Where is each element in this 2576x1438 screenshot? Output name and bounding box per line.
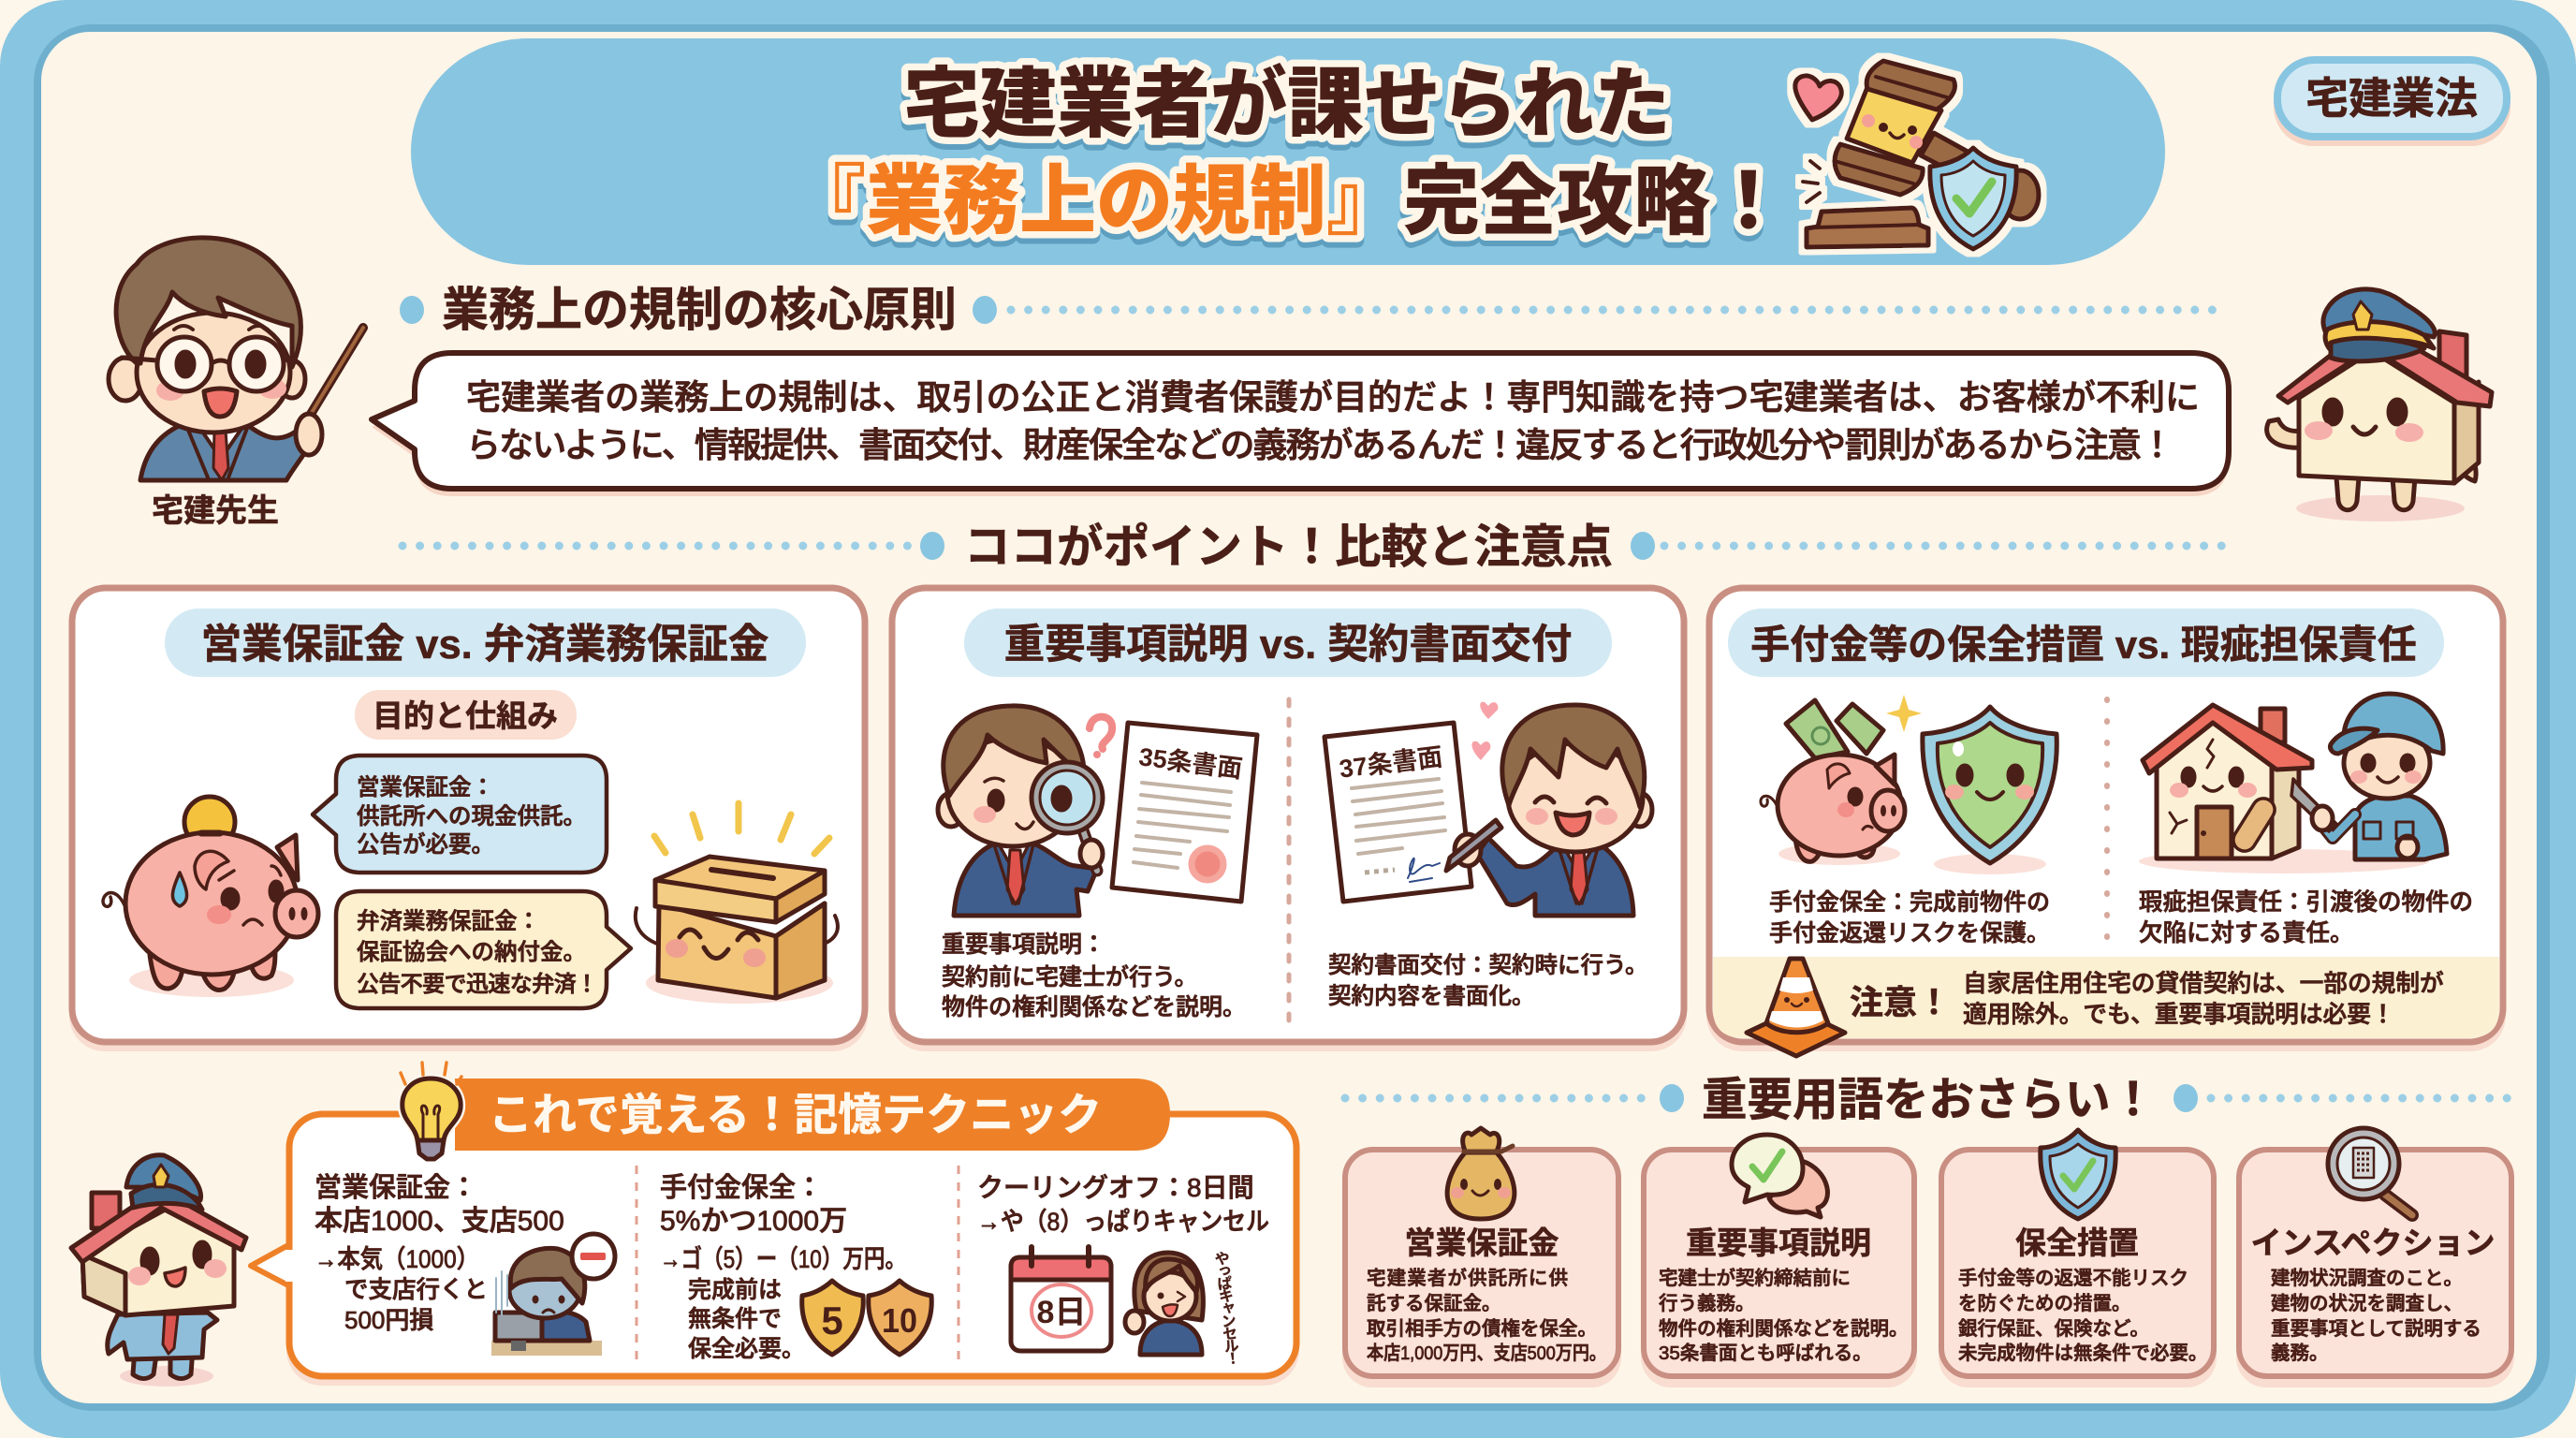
section heading: core principles: 業務上の規制の核心原則 [442,284,957,336]
icon: number 5 and 10 shields: 10 [882,1301,917,1340]
text: 手付金保全 mnemonic [660,1172,906,1362]
icon: worried piggy bank [103,797,318,997]
section heading: points: ココがポイント！比較と注意点 [964,521,1613,573]
memory heading banner: これで覚える！記憶テクニック [489,1090,1102,1139]
text: 契約書面交付: 契約内容を書面化。 [1328,983,1535,1009]
icon: number 5 and 10 shields: 5 [821,1299,843,1343]
character: house with police hat [2267,289,2492,521]
icon: 35条書面 document: 35条書面 [1137,742,1244,784]
icon: lightbulb [401,1063,461,1159]
icon: girl cancelling [1125,1253,1203,1355]
text: 手付金保全 mnemonic: 保全必要。 [688,1336,805,1362]
text: 契約書面交付: 契約書面交付：契約時に行う。 [1328,952,1648,978]
icon: 35条書面 document [1112,723,1257,902]
icon: calendar 8日: 8日 [1037,1295,1086,1330]
card: インスペクション [2236,1128,2514,1387]
section heading: core principles [400,284,2224,336]
icon: depressed worker at desk [491,1234,615,1356]
text: 瑕疵担保責任: 瑕疵担保責任：引渡後の物件の [2139,889,2473,916]
card body text: 義務。 [2271,1343,2329,1364]
icon: 37条書面 document: 37条書面 [1338,742,1444,784]
bubble text: 宅建業者の業務上の規制は、取引の公正と消費者保護が目的だよ！専門知識を持つ宅建業者は、お客様が不利に [466,378,2200,417]
caution text: 適用除外。でも、重要事項説明は必要！ [1963,1001,2395,1028]
panel heading pill: 手付金等の保全措置 vs. 瑕疵担保責任 [1750,623,2417,667]
panel: 重要事項説明 vs 契約書面交付 [889,588,1687,1051]
title text [789,62,1787,244]
panel heading pill [964,609,1612,677]
text: 重要事項説明: 重要事項説明： [942,932,1105,958]
card: 営業保証金: 営業保証金 [1404,1225,1559,1260]
text: 手付金保全: 手付金返還リスクを保護。 [1769,920,2050,946]
card: 保全措置 [1939,1130,2217,1387]
section heading: points [402,521,2224,573]
text: 手付金保全 mnemonic: →ゴ（5）ー（10）万円。 [660,1245,906,1273]
icon: student signing [1446,702,1652,916]
text: 営業保証金 mnemonic: →本気（1000） [315,1245,479,1273]
sub heading pill: 目的と仕組み [373,698,558,733]
icon: gavel and shield [1795,61,2039,249]
icon: shield with check [2041,1130,2115,1219]
text: クーリングオフ mnemonic: クーリングオフ：8日間 [977,1173,1254,1202]
title banner [411,38,2165,265]
icon: speech bubbles with check [1732,1135,1827,1217]
icon: smiling green shield [1923,707,2056,874]
icon: magnifier with building [2328,1128,2412,1215]
card: インスペクション: インスペクション [2250,1225,2496,1260]
card body text [2271,1268,2481,1364]
caution heading: 注意！ [1850,983,1951,1021]
card body text [1367,1268,1606,1364]
icon: traffic cone [1747,959,1845,1056]
icon: repair worker [2291,694,2447,859]
card: 重要事項説明: 重要事項説明 [1686,1225,1871,1260]
bubble: 営業保証金: 供託所への現金供託。 [357,803,586,829]
icon: 37条書面 document [1325,723,1471,902]
panel: 手付金等の保全措置 vs 瑕疵担保責任 [1706,588,2506,1056]
icon: cracked house with bandage [2139,705,2429,873]
card body text: を防ぐための措置。 [1958,1293,2130,1314]
icon: sparkle [1886,695,1922,732]
icon: piggy bank with banknotes [1761,700,1905,865]
text: 手付金保全 mnemonic: 完成前は [688,1277,782,1303]
badge: 宅建業法: 宅建業法 [2305,74,2478,123]
bubble: 弁済業務保証金: 保証協会への納付金。 [357,939,586,965]
sub heading pill [355,690,577,740]
text: 手付金保全 mnemonic: 無条件で [688,1306,782,1332]
text: 営業保証金 mnemonic: 本店1000、支店500 [315,1206,564,1237]
text: 手付金保全 [1769,889,2050,946]
icon: calendar 8日 [1011,1247,1111,1351]
character: teacher [109,238,363,480]
card body text: 重要事項として説明する [2271,1318,2481,1340]
badge: 宅建業法 [2274,60,2510,146]
card: 重要事項説明 [1641,1135,1917,1387]
card body text: 手付金等の返還不能リスク [1958,1268,2188,1289]
text: クーリングオフ mnemonic: →や（8）っぱりキャンセル [977,1208,1269,1236]
text: 瑕疵担保責任 [2139,889,2473,946]
text: 営業保証金 mnemonic [315,1172,564,1334]
panel heading pill: 重要事項説明 vs. 契約書面交付 [1004,623,1572,668]
bubble text: らないように、情報提供、書面交付、財産保全などの義務があるんだ！違反すると行政処分や罰則があるから注意！ [466,426,2174,464]
section heading: glossary: 重要用語をおさらい！ [1702,1075,2156,1125]
text: 重要事項説明: 物件の権利関係などを説明。 [942,994,1246,1020]
card body text [1958,1268,2207,1364]
card body text: 宅建業者が供託所に供 [1367,1268,1568,1289]
text: 営業保証金 mnemonic: 500円損 [344,1306,433,1334]
caution text: 自家居住用住宅の貸借契約は、一部の規制が [1963,970,2444,997]
bubble: 弁済業務保証金 [336,891,631,1008]
caution text [1963,970,2444,1028]
text: 重要事項説明 [942,932,1246,1020]
character: house in suit [71,1155,246,1387]
icon: student with magnifier [938,706,1112,916]
icon: money bag [1447,1128,1515,1219]
text: 契約書面交付 [1328,952,1648,1009]
bubble: 営業保証金: 公告が必要。 [357,831,494,858]
card body text: 建物の状況を調査し、 [2271,1293,2463,1314]
text: 手付金保全 mnemonic: 5%かつ1000万 [660,1206,847,1237]
section heading: glossary [1345,1075,2512,1125]
card body text: 行う義務。 [1659,1293,1754,1314]
card body text: 35条書面とも呼ばれる。 [1659,1343,1872,1364]
speech tail [251,1245,288,1285]
panel heading pill [1728,609,2444,677]
icon: number 5 and 10 shields [802,1281,931,1355]
label: 宅建先生: 宅建先生 [152,493,279,529]
card body text [1659,1268,1908,1364]
card body text: 託する保証金。 [1367,1293,1501,1314]
panel heading pill [165,609,806,677]
bubble: 営業保証金: 営業保証金： [357,774,494,800]
title text: 『業務上の規制』完全攻略！ [789,159,1787,244]
card body text: 本店1,000万円、支店500万円。 [1367,1343,1606,1364]
card: 営業保証金 [1342,1128,1621,1387]
text: クーリングオフ mnemonic [977,1173,1269,1236]
card body text: 未完成物件は無条件で必要。 [1958,1343,2207,1364]
bubble: 弁済業務保証金: 公告不要で迅速な弁済！ [357,972,598,997]
text: 手付金保全 mnemonic: 手付金保全： [660,1172,823,1203]
bubble: 弁済業務保証金: 弁済業務保証金： [357,908,540,934]
card body text: 物件の権利関係などを説明。 [1659,1318,1908,1340]
text: 重要事項説明: 契約前に宅建士が行う。 [942,964,1198,990]
icon: happy deposit box [636,803,838,1004]
memory heading banner [455,1078,1170,1151]
panel: 営業保証金 vs 弁済業務保証金 [69,588,868,1051]
card: 保全措置: 保全措置 [2015,1225,2139,1260]
card body text: 銀行保証、保険など。 [1958,1318,2149,1340]
panel: memory techniques [251,1063,1299,1386]
text: vertical cancel exclamation: やっぱキャンセル！ [1211,1250,1241,1366]
text: 手付金保全: 手付金保全：完成前物件の [1769,889,2050,916]
panel heading pill: 営業保証金 vs. 弁済業務保証金 [201,623,768,668]
card body text: 取引相手方の債権を保全。 [1367,1318,1597,1340]
caution band [1713,957,2499,1038]
text: 営業保証金 mnemonic: で支店行くと [344,1277,488,1303]
card body text: 宅建士が契約締結前に [1659,1268,1851,1289]
text: 瑕疵担保責任: 欠陥に対する責任。 [2139,920,2354,946]
title text: 宅建業者が課せられた [903,62,1671,147]
card body text: 建物状況調査のこと。 [2271,1268,2463,1289]
bubble: 営業保証金 [313,756,607,873]
text: 営業保証金 mnemonic: 営業保証金： [315,1172,477,1203]
bubble text [466,378,2200,464]
speech bubble: core principles [372,353,2229,496]
